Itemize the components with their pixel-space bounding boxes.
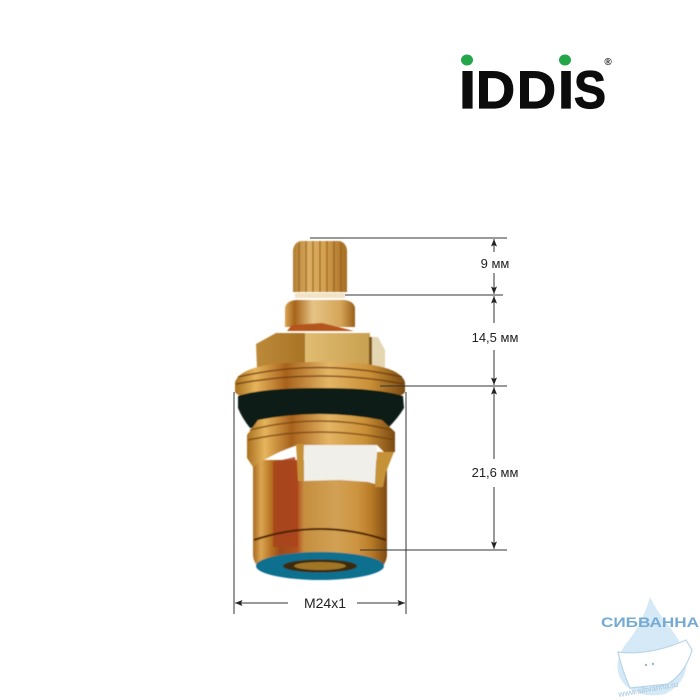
registered mark: ®: [604, 57, 612, 68]
window side tabs: [296, 444, 394, 487]
collar: [285, 300, 355, 331]
vertical dimension: 14.5 mm: [493, 296, 495, 385]
bath face: [645, 663, 654, 666]
logo letters: I: [558, 61, 574, 120]
cartridge valve photo: [235, 241, 405, 580]
hex nut: [256, 333, 385, 368]
white ceramic window: [304, 445, 377, 484]
logo green dots: [461, 54, 571, 66]
vertical dimension: 9 mm: [493, 239, 495, 294]
body groove: [254, 529, 386, 540]
bath: [618, 640, 692, 688]
logo: IDDIS: [459, 54, 612, 120]
watermark: Sibvanna: [601, 597, 699, 699]
brand text: СИБВАННА: [601, 614, 699, 630]
black o-ring: [238, 388, 404, 428]
flange with threads: [235, 362, 405, 404]
water drop: [618, 597, 687, 695]
red reflection: [273, 457, 298, 547]
blue seal: [256, 552, 384, 580]
dimension labels: M24x1: [304, 595, 346, 611]
logo letters: D: [476, 61, 515, 120]
logo letters: D: [517, 61, 556, 120]
extension lines: [310, 238, 507, 550]
dimension labels: 9 мм: [481, 256, 509, 271]
dimension labels: [304, 256, 518, 611]
vertical dimension: 21.6 mm: [493, 387, 495, 549]
website text: www.sibvanna.ru: [617, 680, 679, 699]
dimension labels: 21,6 мм: [472, 465, 518, 480]
horizontal dimension: M24x1: [234, 392, 406, 614]
logo letters: I: [459, 61, 476, 120]
spline stem: [293, 241, 347, 298]
lower threads: [247, 414, 395, 467]
dimension labels: 14,5 мм: [472, 330, 518, 345]
dimension lines: [234, 238, 507, 614]
lower body: [253, 460, 387, 579]
logo letters: S: [574, 61, 606, 120]
logo letters: [459, 61, 606, 120]
